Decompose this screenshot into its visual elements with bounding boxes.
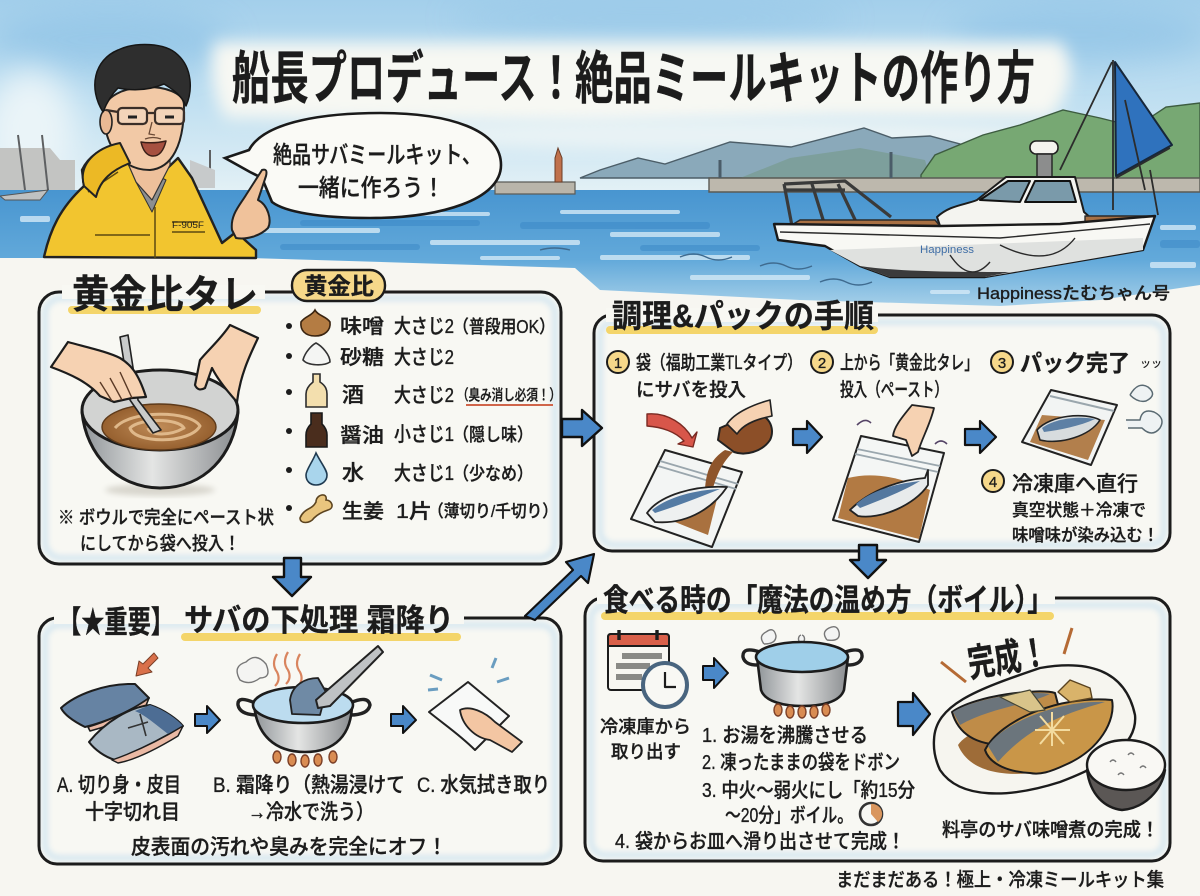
nose and moustache: [145, 122, 161, 139]
boat name: Happiness: [920, 244, 975, 256]
reheating steps: 1. お湯を沸騰させる: [702, 724, 868, 747]
panel: reheating by boiling: [585, 583, 1170, 861]
row: sake: 大さじ2: [394, 384, 454, 407]
distant blue mountains: [580, 128, 975, 178]
icon: water drop: [306, 453, 327, 485]
darker water streaks: [280, 220, 1200, 251]
take out text: 取り出す: [611, 742, 681, 762]
sail: [1115, 62, 1172, 176]
right hand: [195, 325, 258, 402]
speech bubble: [225, 113, 501, 218]
step 2 text: [811, 351, 978, 401]
icon: soy sauce: [306, 413, 327, 447]
step 4 text: 冷凍庫へ直行: [1012, 473, 1138, 496]
canopy frame: [784, 181, 891, 226]
poles on breakwater: [720, 152, 891, 178]
icon: small timer: [860, 803, 882, 825]
hull: [774, 216, 1155, 277]
sea: [0, 190, 1200, 306]
row: miso: [340, 315, 555, 338]
heading underline: [606, 326, 878, 334]
illustration: rice bowl: [1087, 740, 1165, 810]
boat caption: Happinessたむちゃん号: [977, 284, 1170, 303]
panel frame: [39, 285, 561, 564]
radar: [1030, 141, 1058, 178]
labels A B C: B. 霜降り（熱湯浸けて: [213, 774, 405, 797]
hood collar: [83, 143, 130, 197]
panel: golden ratio sauce: にしてから袋へ投入！: [80, 533, 240, 554]
harbour scene background: [0, 0, 1200, 306]
step 3 text: ッッ: [1140, 358, 1162, 370]
step 2 text: 上から「黄金比タレ」: [840, 352, 978, 374]
row: sake: （臭み消し必須！）: [457, 386, 561, 404]
arrow: panel 3 to panel 2: [525, 554, 594, 620]
step 2 text: 投入（ペースト）: [840, 379, 948, 401]
wavelets: [540, 248, 872, 285]
heading: 黄金比タレ: [72, 274, 258, 317]
bottle: [718, 414, 772, 454]
plate: [934, 665, 1135, 793]
small breakwater: [495, 182, 575, 194]
row: sugar: 大さじ2: [394, 346, 454, 369]
flames: [273, 751, 337, 767]
arrow: B to C: [391, 706, 416, 733]
arrow: step 2 to 3: [965, 421, 996, 453]
mackerel back: [952, 691, 1060, 745]
pot body: [254, 703, 352, 752]
labels A B C: [57, 773, 550, 824]
cabin: [937, 177, 1100, 226]
step 1 text: 1: [614, 355, 622, 372]
steam: [761, 627, 839, 644]
footer note: まだまだある！極上・冷凍ミールキット集: [836, 869, 1164, 891]
badge: [292, 270, 385, 301]
eyes: [128, 116, 174, 118]
icon: miso: [301, 310, 330, 336]
jacket logo: F-905F: [172, 220, 205, 230]
fish in tongs: [290, 678, 326, 715]
step 3 text: [991, 350, 1162, 376]
sea highlights: [20, 210, 1196, 294]
step 4 text: 4: [989, 474, 997, 491]
finished label: 完成！: [965, 632, 1051, 686]
lighthouse: [555, 148, 562, 182]
heading: 食べる時の「魔法の温め方（ボイル）」: [603, 583, 1053, 618]
puffs: [1126, 385, 1162, 433]
heading underline: [68, 306, 261, 314]
flames: [774, 704, 830, 718]
left harbour with masts: [0, 135, 215, 200]
step 1 text: にサバを投入: [636, 379, 746, 401]
hand: [727, 400, 772, 434]
row: water: 大さじ1: [394, 462, 454, 485]
bubble text: 絶品サバミールキット、: [273, 142, 481, 169]
bag: [631, 450, 742, 547]
arrow: panel 1 to panel 3: [273, 558, 311, 596]
row: soy sauce: 小さじ1: [394, 423, 454, 446]
panel: cooking and packing steps: [594, 298, 1170, 551]
pale clouds: [0, 70, 1080, 190]
panel: golden ratio sauce: [39, 270, 561, 564]
panel: mackerel pre-treatment: [39, 603, 561, 864]
orange arrow: [136, 653, 158, 676]
hull keel: [860, 266, 1010, 277]
icon: ginger: [300, 495, 332, 522]
arrow: A to B: [195, 706, 220, 733]
pouring sauce: [705, 450, 733, 492]
row: miso: （普段用OK）: [453, 317, 555, 337]
row: sugar: 砂糖: [340, 346, 384, 369]
panel frame: [585, 590, 1170, 861]
fish: [647, 487, 727, 522]
labels A B C: →冷水で洗う）: [248, 801, 374, 824]
row: water: [342, 462, 533, 485]
speech bubble: 一緒に作ろう！: [298, 175, 444, 202]
heading underline: [181, 633, 461, 641]
illustration A: scored fillets: [61, 653, 183, 763]
pot body: [757, 657, 848, 706]
blue-green mountain slopes: [740, 148, 930, 178]
takeaway text: 皮表面の汚れや臭みを完全にオフ！: [131, 836, 447, 859]
illustration B: boiling pot with tongs: [237, 646, 383, 767]
labels A B C: C. 水気拭き取り: [417, 773, 550, 797]
mouth: [141, 141, 166, 156]
heading: サバの下処理 霜降り: [184, 603, 454, 638]
puff: [237, 657, 268, 683]
main breakwater: [709, 178, 1200, 192]
panel frame: [39, 610, 561, 864]
reheating steps: 2. 凍ったままの袋をドボン: [702, 751, 900, 774]
motion lines: [857, 420, 947, 444]
illustration: boiling pot: [743, 627, 862, 718]
ingredient list: [286, 310, 561, 523]
arrow: panel 1 to panel 2: [562, 410, 602, 446]
labels A B C: 十字切れ目: [85, 801, 180, 824]
illustration C: towel and hand: [428, 658, 522, 752]
step 3 text: 3: [998, 355, 1006, 372]
row: soy sauce: （隠し味）: [453, 425, 533, 445]
hull lines and rope: [780, 224, 1150, 272]
steam: [274, 652, 302, 686]
jacket: [44, 143, 256, 258]
reheating steps: 4. 袋からお皿へ滑り出させて完成！: [615, 830, 905, 853]
row: miso: 大さじ2: [394, 315, 454, 338]
sauce: [958, 713, 1106, 774]
row: soy sauce: 醤油: [340, 424, 384, 447]
step 3 text: パック完了: [1020, 350, 1130, 376]
tongs: [316, 646, 383, 708]
labels A B C: A. 切り身・皮目: [57, 774, 181, 797]
arrow: panel 2 to panel 4: [850, 545, 886, 578]
reheating steps: ～20分」ボイル。: [725, 804, 853, 827]
boat Happiness: [774, 60, 1172, 277]
take out text: 冷凍庫から: [600, 717, 691, 737]
sky: [0, 0, 1200, 200]
step 3 illustration: vacuum bag with puffs: [1022, 385, 1162, 465]
step 4 text: [982, 470, 1159, 545]
scoring: [1035, 712, 1070, 746]
handles: [743, 650, 862, 665]
hull lower shading: [830, 238, 1143, 277]
row: miso: 味噌: [340, 315, 384, 338]
step 2 text: 2: [818, 355, 826, 372]
stern deck: [790, 216, 1150, 226]
title backdrop cloud: [212, 42, 1070, 125]
water: [253, 687, 353, 723]
step 4 text: 味噌味が染み込む！: [1012, 525, 1159, 545]
mixing bowl illustration: [51, 325, 258, 496]
red arrow: [647, 414, 697, 447]
ear: [100, 110, 112, 134]
row: ginger: （薄切り/千切り）: [428, 502, 558, 521]
face: [104, 87, 184, 170]
water: [756, 642, 848, 672]
left hand fingers: [100, 372, 132, 401]
jacket seams: [88, 172, 205, 258]
icon: calendar and clock: [608, 630, 687, 707]
step 4 text: 真空状態＋冷凍で: [1012, 501, 1146, 520]
fillet front: [89, 705, 183, 760]
fillet back: [61, 684, 149, 727]
icon: sugar: [303, 343, 330, 365]
row: soy sauce: [340, 423, 533, 447]
hand: [893, 405, 934, 456]
arrow: step 1 to 2: [793, 421, 822, 453]
fish: [850, 470, 928, 517]
sauce pile: [665, 495, 718, 535]
arrow: calendar to pot: [703, 658, 728, 688]
mast and stays: [1060, 60, 1170, 215]
heading: 調理&パックの手順: [612, 298, 874, 334]
arrow: to finished dish: [898, 693, 930, 735]
pointing hand: [232, 170, 270, 239]
bullets: [286, 323, 292, 511]
reheating steps: [615, 724, 915, 853]
bubble shape: [225, 113, 501, 218]
left hand: [51, 342, 146, 402]
shirt: [136, 172, 166, 212]
cabin windows: [980, 181, 1076, 202]
icon: sake bottle: [306, 374, 327, 407]
row: water: 水: [342, 462, 364, 485]
row: sugar: [340, 346, 454, 369]
hair: [95, 45, 190, 112]
heading: [58, 603, 454, 640]
take out text: [600, 717, 691, 762]
glasses: [106, 108, 184, 124]
step 1 text: [607, 351, 802, 401]
deeper blue sky patches: [0, 6, 1200, 70]
step 1 illustration: bag with fish and sauce: [631, 400, 772, 547]
row: water: （少なめ）: [453, 464, 533, 484]
handles: [238, 699, 370, 715]
row: sake: [342, 384, 561, 407]
badge: 黄金比: [304, 273, 374, 299]
heading: 【★重要】: [58, 605, 174, 640]
bowl note: ※ ボウルで完全にペースト状: [58, 507, 274, 528]
step 2 illustration: bag held by hand: [833, 405, 947, 542]
row: ginger: 生姜: [342, 500, 384, 523]
reheating steps: 3. 中火～弱火にし「約15分: [702, 779, 915, 802]
panel frame: [594, 308, 1170, 551]
captain character: [44, 45, 270, 258]
illustration: finished mackerel plate: [934, 665, 1135, 793]
ginger garnish: [1058, 680, 1092, 702]
row: sake: 酒: [342, 384, 364, 407]
green mountains: [921, 103, 1200, 180]
neck: [122, 150, 170, 200]
negi: [1000, 690, 1045, 712]
row: ginger: [342, 500, 558, 523]
row: ginger: 1片: [396, 500, 432, 523]
finished caption: 料亭のサバ味噌煮の完成！: [942, 819, 1159, 841]
heading underline: [601, 612, 1054, 620]
step 1 text: 袋（福助工業TLタイプ）: [636, 352, 802, 374]
mackerel front: [985, 699, 1113, 774]
